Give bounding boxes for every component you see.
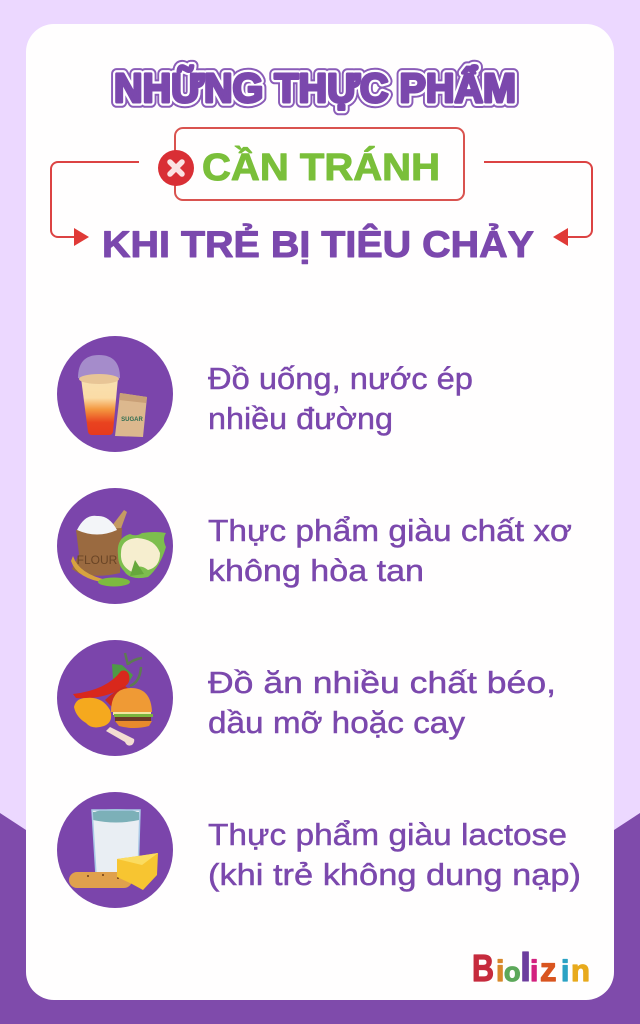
item 2: fibre: không hòa tan	[208, 553, 424, 588]
arrow: right connector	[484, 162, 592, 246]
title: những thực phẩm: NHỮNG THỰC PHẨM	[114, 64, 516, 111]
arrow: left connector	[51, 162, 139, 246]
icon: chilli, chicken and burger	[57, 640, 173, 756]
heading: khi trẻ bị tiêu chảy: KHI TRẺ BỊ TIÊU CHẢY	[102, 223, 534, 265]
item 3: fatty food: dầu mỡ hoặc cay	[208, 705, 466, 740]
text: fibre: Thực phẩm giàu chất xơ	[208, 513, 572, 548]
icon: milk, biscuit and cheese	[57, 792, 173, 908]
text: fatty food: Đồ ăn nhiều chất béo,	[208, 665, 556, 700]
icon: drink and sugar: SUGAR	[121, 417, 143, 423]
logo: Biolizin: z	[540, 951, 556, 988]
item 1: drinks	[57, 336, 473, 452]
logo: Biolizin: o	[504, 957, 520, 987]
item 3: fatty food	[57, 640, 556, 756]
logo: Biolizin	[472, 946, 590, 990]
logo: Biolizin: n	[571, 953, 590, 988]
logo: Biolizin: i	[496, 955, 504, 988]
text: lactose: Thực phẩm giàu lactose	[208, 817, 567, 852]
logo: Biolizin: l	[520, 946, 531, 990]
icon: red cross	[158, 150, 194, 186]
item 4: lactose	[57, 792, 581, 908]
title: những thực phẩm: NHỮNG THỰC PHẨM	[114, 64, 516, 111]
item 4: lactose: (khi trẻ không dung nạp)	[208, 857, 581, 892]
icon: flour and cauliflower	[57, 488, 173, 604]
logo: Biolizin: i	[530, 955, 538, 988]
icon: flour and cauliflower: FLOUR	[77, 553, 118, 567]
heading: cần tránh: CẦN TRÁNH	[202, 145, 440, 189]
logo: Biolizin: i	[561, 955, 569, 988]
icon: drink and sugar	[57, 336, 173, 452]
logo: Biolizin: B	[472, 948, 494, 990]
callout: cần tránh box	[158, 128, 464, 200]
item 1: drinks: nhiều đường	[208, 401, 393, 436]
title: những thực phẩm: NHỮNG THỰC PHẨM	[114, 64, 516, 111]
item 2: fibre	[57, 488, 572, 604]
text: drinks: Đồ uống, nước ép	[208, 361, 473, 396]
